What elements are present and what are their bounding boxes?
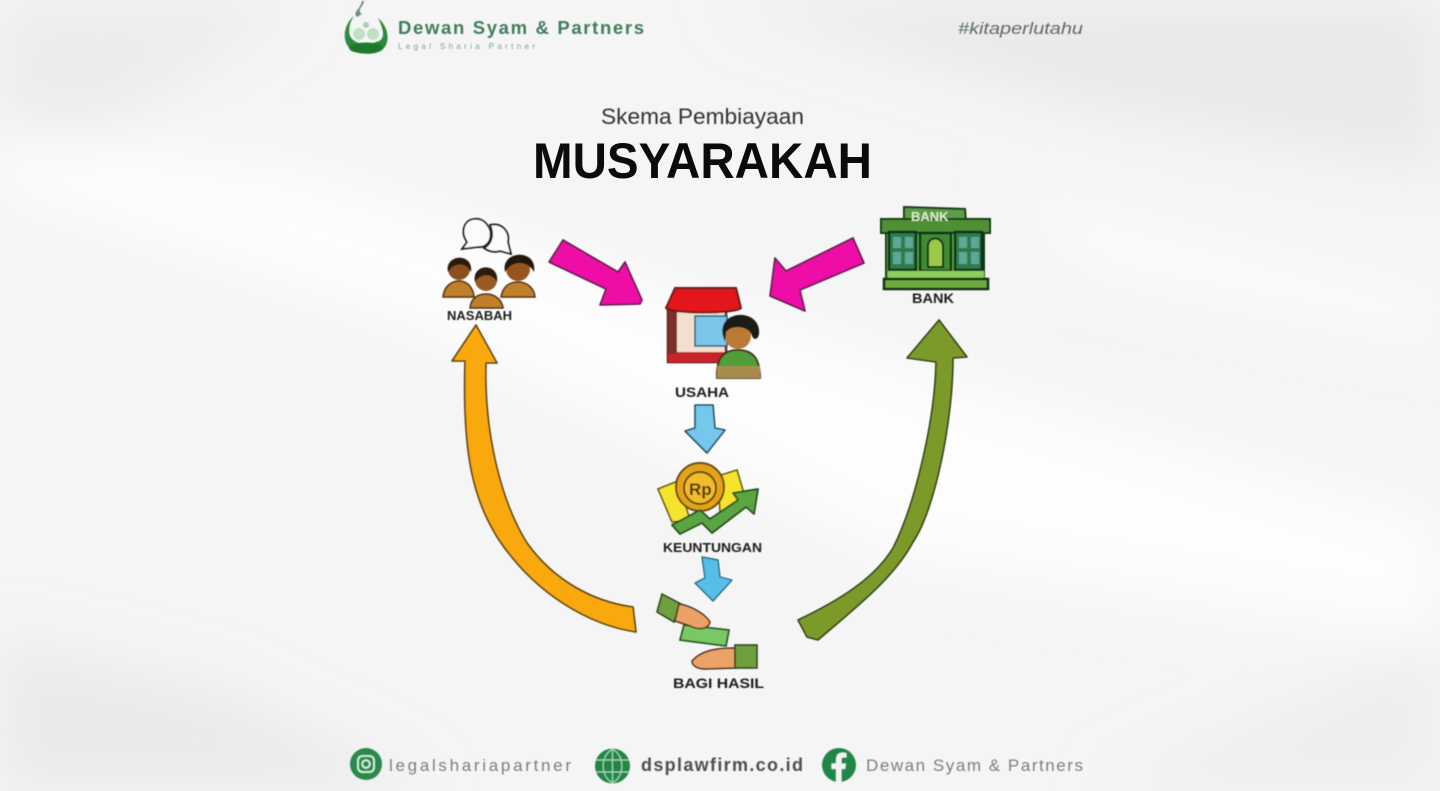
label: Bank: BANK <box>912 291 954 306</box>
node: Bank <box>881 207 990 306</box>
arrow: Usaha to Keuntungan <box>685 405 725 453</box>
logo: Dewan Syam & Partners <box>345 1 644 54</box>
arrow: Keuntungan to Bagi Hasil <box>695 557 732 601</box>
facebook name: Dewan Syam & Partners <box>866 756 1083 775</box>
arrow: Nasabah to Usaha <box>549 240 642 305</box>
icon: website globe <box>595 748 630 784</box>
icon: facebook <box>822 748 856 782</box>
icon: logo emblem <box>345 1 388 54</box>
website address: dsplawfirm.co.id <box>641 755 803 775</box>
node: Nasabah <box>443 219 535 323</box>
arrow: Bagi Hasil to Nasabah <box>452 325 636 632</box>
label: Nasabah: NASABAH <box>447 309 512 323</box>
label: Keuntungan: KEUNTUNGAN <box>663 541 762 555</box>
icon: coin, money bags and rising arrow: Rp <box>689 480 712 499</box>
icon: hands exchanging money <box>657 594 757 669</box>
logo name: Dewan Syam & Partners <box>398 17 644 38</box>
hashtag: #kitaperlutahu <box>958 19 1084 38</box>
title: MUSYARAKAH <box>533 133 872 189</box>
icon: three customers <box>443 255 535 308</box>
icon: instagram <box>350 748 382 780</box>
instagram handle: legalshariapartner <box>389 756 571 775</box>
arrow: Bagi Hasil to Bank <box>798 320 967 640</box>
footer: social links <box>350 748 1083 784</box>
icon: shop with owner <box>666 288 760 378</box>
icon: speech bubbles <box>462 219 511 254</box>
node: Usaha <box>666 288 760 400</box>
label: Usaha: USAHA <box>675 384 729 400</box>
node: Bagi Hasil <box>657 594 765 691</box>
logo tagline: Legal Sharia Partner <box>398 42 535 51</box>
node: Keuntungan <box>658 463 762 555</box>
arrow: Bank to Usaha <box>770 238 864 311</box>
subtitle: Skema Pembiayaan <box>601 104 804 129</box>
icon: bank building: BANK <box>911 209 949 224</box>
label: Bagi Hasil: BAGI HASIL <box>673 675 765 691</box>
